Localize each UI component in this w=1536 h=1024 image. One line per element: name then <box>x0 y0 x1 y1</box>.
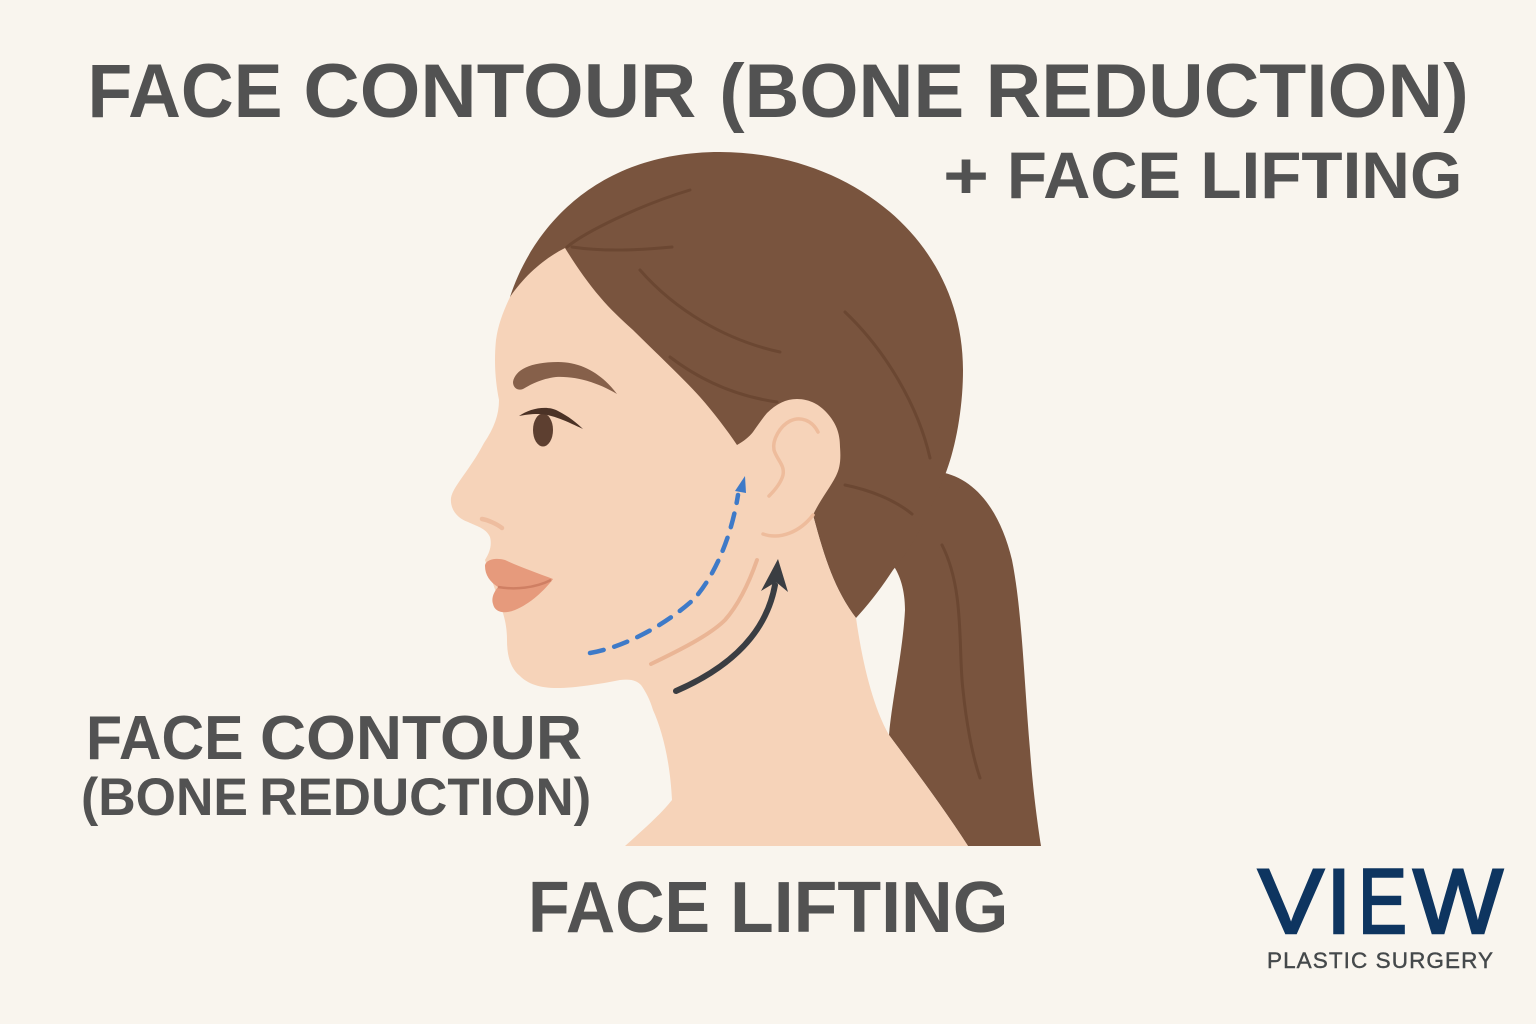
illustration: head profile <box>451 152 1041 846</box>
title: FACE <box>88 49 282 134</box>
jawline crease <box>651 560 757 664</box>
lips <box>485 559 553 612</box>
label: face lifting: LIFTING <box>730 868 1008 948</box>
title: REDUCTION) <box>986 49 1469 134</box>
hair strands <box>567 190 980 778</box>
title <box>88 49 1469 212</box>
logo: VIEW Plastic Surgery: PLASTIC SURGERY <box>1267 948 1493 973</box>
title: + <box>943 138 989 212</box>
label: face lifting <box>528 868 1008 948</box>
logo: VIEW Plastic Surgery: V <box>1258 851 1324 953</box>
eyebrow <box>513 362 617 394</box>
title: LIFTING <box>1200 138 1462 212</box>
label: face contour: FACE <box>86 704 244 773</box>
skin: face, ear and neck <box>451 248 968 846</box>
title: CONTOUR <box>303 49 696 134</box>
logo: VIEW Plastic Surgery: W <box>1413 851 1503 953</box>
hair <box>510 152 963 618</box>
logo: VIEW Plastic Surgery: I <box>1326 851 1352 953</box>
label: face lifting: FACE <box>528 868 710 948</box>
eye <box>519 408 583 446</box>
title: FACE <box>1007 138 1181 212</box>
label: face contour: CONTOUR <box>260 704 582 773</box>
label: face contour: (BONE <box>81 768 248 827</box>
ear detail <box>763 419 818 536</box>
label: face contour <box>81 704 591 827</box>
logo: VIEW Plastic Surgery: E <box>1358 851 1407 953</box>
title: (BONE <box>719 49 964 134</box>
ponytail <box>889 472 1041 846</box>
dark lifting arrow <box>676 559 788 691</box>
nostril <box>482 519 502 528</box>
logo: VIEW Plastic Surgery <box>1258 851 1503 973</box>
blue dashed incision arrow <box>590 476 746 653</box>
label: face contour: REDUCTION) <box>259 768 591 827</box>
